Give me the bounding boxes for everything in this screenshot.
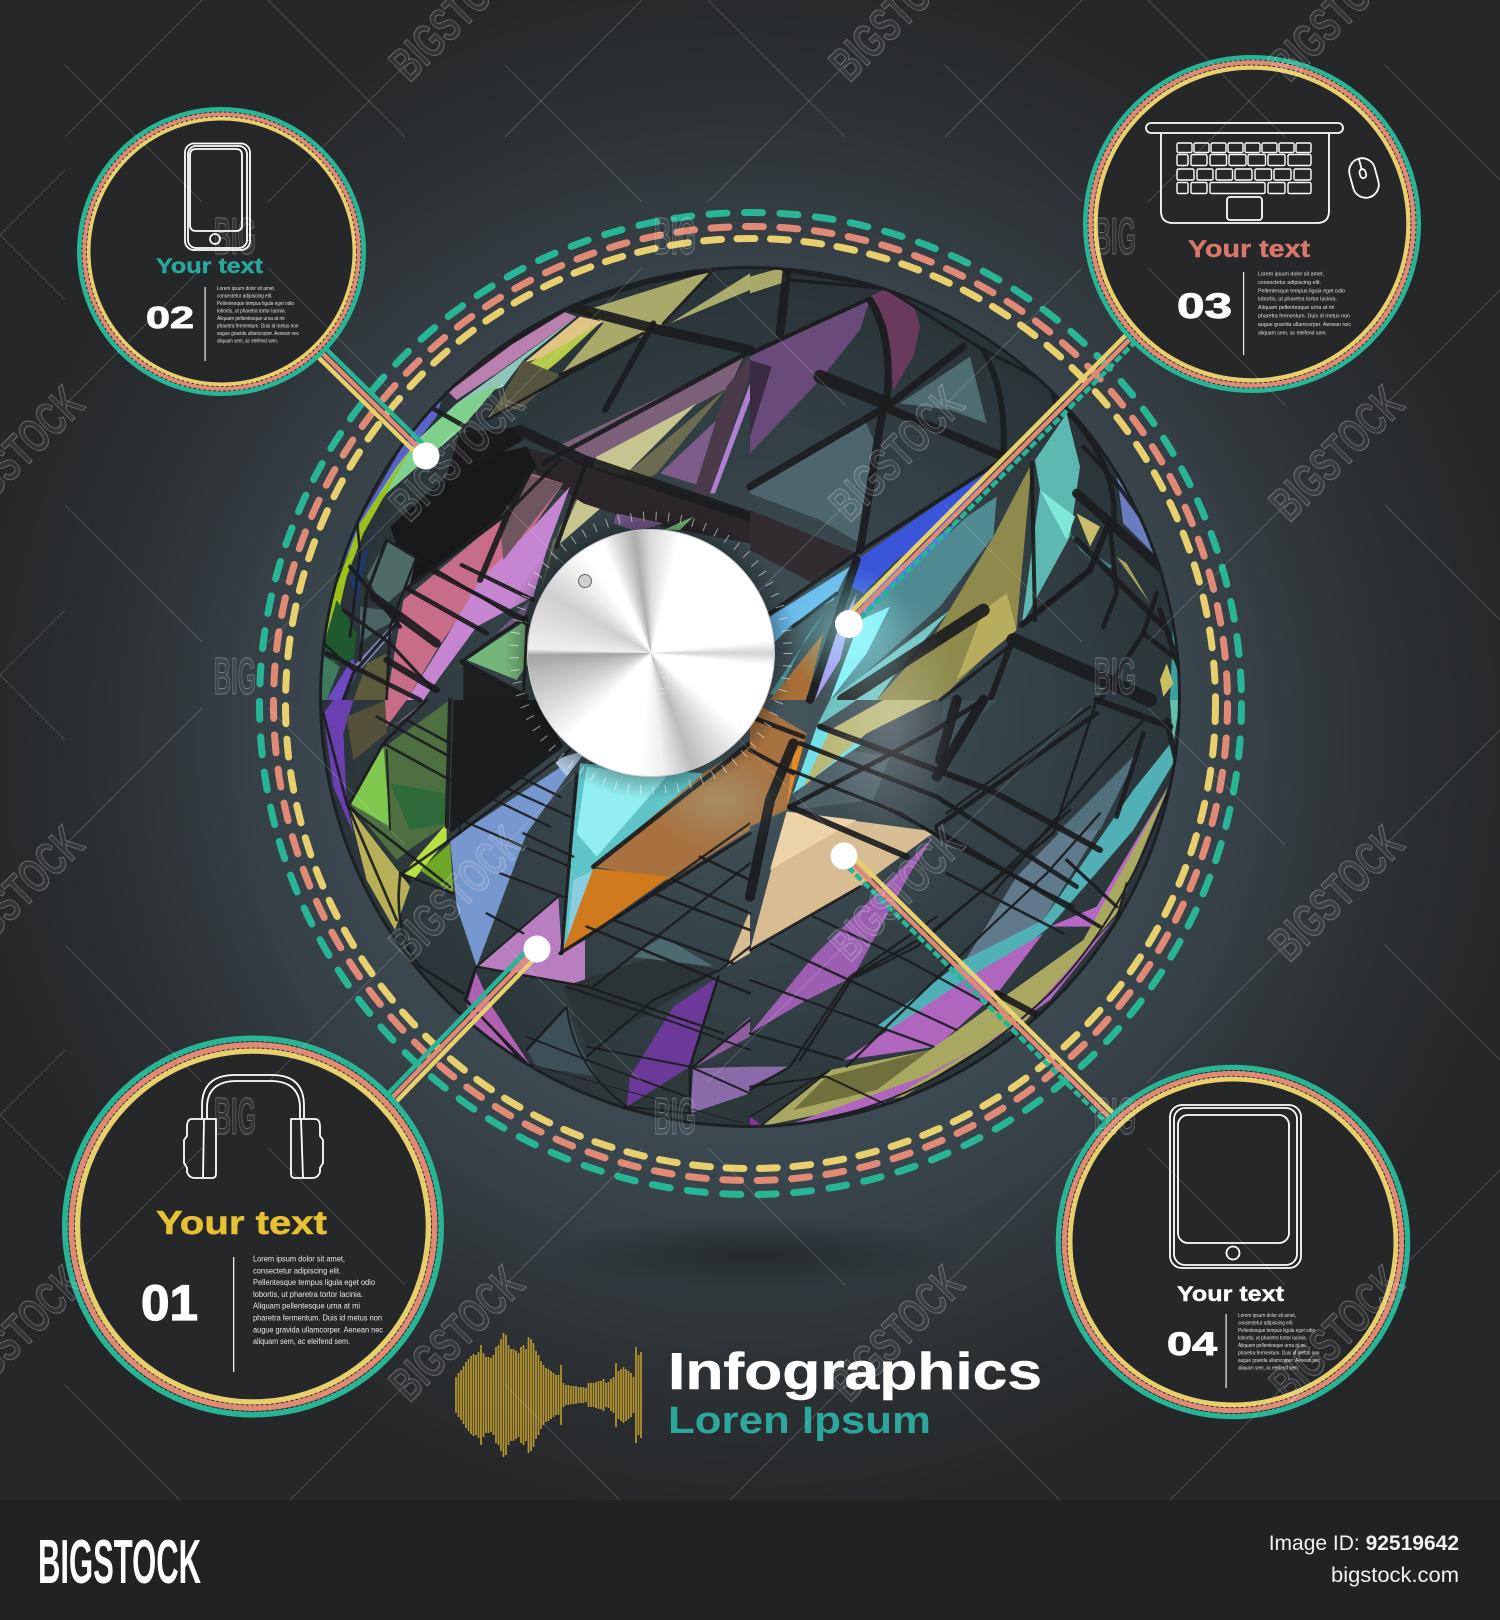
number 03: 03 bbox=[1177, 287, 1232, 326]
watermark text: BIG bbox=[214, 208, 256, 266]
panel 01 headphones bbox=[65, 1038, 441, 1414]
divider 02 bbox=[204, 287, 206, 361]
icon: laptop bbox=[1146, 123, 1343, 223]
body text 04: Aliquam pellentesque urna at mi bbox=[1238, 1343, 1306, 1349]
sphere quadrant: upper left bbox=[320, 270, 750, 700]
body text 01: Pellentesque tempus ligula eget odio bbox=[253, 1278, 376, 1287]
watermark text: BIGSTOCK bbox=[820, 1257, 974, 1411]
divider 04 bbox=[1226, 1314, 1227, 1388]
body text 02: consectetur adipiscing elit. bbox=[217, 294, 272, 300]
body text 01: Lorem ipsum dolor sit amet, bbox=[253, 1254, 345, 1264]
heading 04: Your text bbox=[1177, 1283, 1284, 1306]
body text 04: Lorem ipsum dolor sit amet, bbox=[1238, 1313, 1296, 1319]
knob tick marks bbox=[514, 516, 788, 790]
body text 02: augue gravida ullamcorper. Aenean nec bbox=[217, 331, 299, 337]
sphere grid: lower left bbox=[323, 700, 750, 1123]
divider 01 bbox=[233, 1257, 234, 1372]
body text 01 bbox=[253, 1254, 383, 1346]
body text 03: Lorem ipsum dolor sit amet, bbox=[1258, 272, 1324, 278]
body text 02: lobortis, ut pharetra tortor lacinia. bbox=[217, 308, 286, 314]
body text 03: lobortis, ut pharetra tortor lacinia. bbox=[1258, 297, 1337, 303]
panel 03 laptop bbox=[1086, 58, 1418, 390]
body text 04: Pellentesque tempus ligula eget odio bbox=[1238, 1328, 1315, 1334]
connector dots bbox=[412, 442, 863, 962]
body text 03: pharetra fermentum. Duis id metus non bbox=[1258, 314, 1350, 320]
watermark text: BIGSTOCK bbox=[820, 817, 974, 971]
watermark text: BIGSTOCK bbox=[820, 377, 974, 531]
heading 01: Your text bbox=[156, 1204, 327, 1241]
panel 02 phone bbox=[80, 110, 364, 394]
body text 01: augue gravida ullamcorper. Aenean nec bbox=[253, 1325, 383, 1334]
sphere bbox=[319, 266, 1190, 1128]
watermark text: BIGSTOCK bbox=[380, 1257, 534, 1411]
connector 01 bbox=[384, 944, 541, 1106]
body text 04: lobortis, ut pharetra tortor lacinia. bbox=[1238, 1336, 1307, 1342]
number 02: 02 bbox=[146, 300, 194, 335]
body text 04: pharetra fermentum. Duis id metus non bbox=[1238, 1350, 1320, 1356]
watermark text: BIG bbox=[654, 208, 696, 266]
body text 04: augue gravida ullamcorper. Aenean nec bbox=[1238, 1358, 1320, 1364]
body text 01: consectetur adipiscing elit. bbox=[253, 1266, 341, 1275]
watermark text: BIG bbox=[654, 1088, 696, 1146]
title bbox=[668, 1343, 1042, 1442]
body text 02: Lorem ipsum dolor sit amet, bbox=[217, 286, 275, 292]
heading 03: Your text bbox=[1188, 236, 1310, 263]
body text 02 bbox=[217, 286, 299, 344]
knob indicator bbox=[578, 574, 592, 588]
footer band bbox=[0, 1500, 1500, 1620]
sphere quadrant: lower right bbox=[750, 700, 1180, 1127]
heading 02: Your text bbox=[156, 255, 263, 278]
sound waveform bbox=[456, 1333, 641, 1457]
sphere grid: upper right bbox=[750, 270, 1190, 700]
watermark text: BIG bbox=[1094, 648, 1136, 706]
sphere quadrant: lower left bbox=[323, 700, 750, 1123]
body text 04: aliquam sem, ac eleifend sem. bbox=[1238, 1366, 1299, 1372]
body text 01: lobortis, ut pharetra tortor lacinia. bbox=[253, 1290, 363, 1299]
connector 04 bbox=[840, 851, 1121, 1129]
ring 01 bbox=[65, 1038, 441, 1414]
volume knob bbox=[505, 507, 797, 799]
icon: phone bbox=[185, 144, 250, 250]
number 04: 04 bbox=[1167, 1326, 1217, 1362]
footer logo: BIGSTOCK bbox=[38, 1528, 201, 1597]
subtitle: Loren Ipsum bbox=[668, 1400, 931, 1442]
body text 03 bbox=[1258, 272, 1352, 336]
body text 02: Pellentesque tempus ligula eget odio bbox=[217, 301, 294, 307]
ring 02 bbox=[80, 110, 364, 394]
watermark text: BIG bbox=[654, 648, 696, 706]
connector 02 bbox=[313, 344, 430, 459]
watermark text: BIGSTOCK bbox=[380, 377, 534, 531]
number 01: 01 bbox=[141, 1275, 198, 1331]
body text 03: Aliquam pellentesque urna at mi bbox=[1258, 305, 1334, 311]
watermark text: BIG bbox=[214, 1088, 256, 1146]
sphere quadrant: upper right bbox=[750, 267, 1190, 700]
sphere grid: upper left bbox=[323, 270, 750, 700]
body text 01: pharetra fermentum. Duis id metus non bbox=[253, 1314, 382, 1322]
sphere glow bbox=[664, 570, 948, 840]
knob rim bbox=[527, 529, 775, 777]
footer image id: Image ID: 92519642 bbox=[1269, 1532, 1459, 1555]
body text 03: consectetur adipiscing elit. bbox=[1258, 280, 1321, 286]
title: Infographics bbox=[668, 1343, 1042, 1401]
watermark text: BIGSTOCK bbox=[1260, 1257, 1414, 1411]
watermark text: BIG bbox=[1094, 1088, 1136, 1146]
divider 03 bbox=[1243, 272, 1244, 355]
watermark text: BIG bbox=[1094, 208, 1136, 266]
floor shadow bbox=[544, 1217, 964, 1293]
body text 03: augue gravida ullamcorper. Aenean nec bbox=[1258, 322, 1352, 328]
body text 03: aliquam sem, ac eleifend sem. bbox=[1258, 330, 1327, 336]
ring 04 bbox=[1058, 1068, 1408, 1416]
knob face bbox=[528, 530, 774, 776]
icon: headphones bbox=[184, 1075, 323, 1178]
watermark text: BIGSTOCK bbox=[1260, 817, 1414, 971]
body text 04 bbox=[1238, 1313, 1320, 1372]
body text 02: aliquam sem, ac eleifend sem. bbox=[217, 338, 278, 344]
body text 02: Aliquam pellentesque urna at mi bbox=[217, 316, 284, 322]
connector 03 bbox=[844, 333, 1136, 627]
watermark text: BIGSTOCK bbox=[1260, 377, 1414, 531]
body text 04: consectetur adipiscing elit. bbox=[1238, 1320, 1294, 1326]
panel 04 tablet bbox=[1058, 1068, 1408, 1416]
body text 01: Aliquam pellentesque urna at mi bbox=[253, 1302, 360, 1311]
icon: mouse bbox=[1346, 155, 1382, 201]
ring 03 bbox=[1086, 58, 1418, 390]
body text 03: Pellentesque tempus ligula eget odio bbox=[1258, 288, 1345, 294]
footer site: bigstock.com bbox=[1331, 1564, 1459, 1587]
body text 02: pharetra fermentum. Duis id metus non bbox=[217, 324, 299, 330]
watermark text: BIG bbox=[214, 648, 256, 706]
icon: tablet bbox=[1170, 1105, 1301, 1268]
body text 01: aliquam sem, ac eleifend sem. bbox=[253, 1337, 350, 1346]
dashed ring bbox=[260, 212, 1242, 1194]
sphere grid: lower right bbox=[750, 700, 1177, 1127]
watermark text: BIGSTOCK bbox=[380, 817, 534, 971]
